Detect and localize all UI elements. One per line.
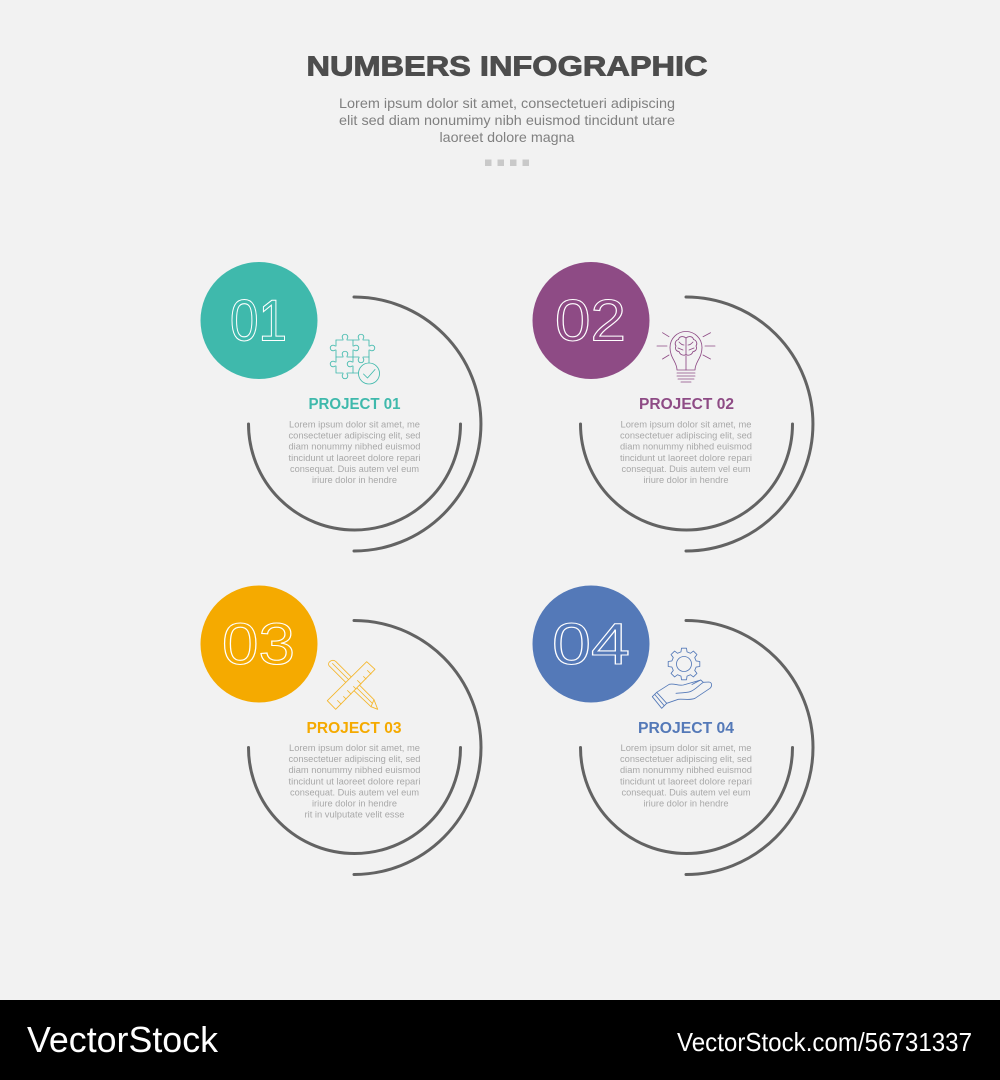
number 02: 02 xyxy=(555,288,626,354)
body text: iriure dolor in hendre xyxy=(312,798,397,810)
body text: rit in vulputate velit esse xyxy=(304,810,404,821)
inner arc xyxy=(248,748,460,854)
body text: consequat. Duis autem vel eum xyxy=(290,464,419,475)
icon: hand holding gear xyxy=(652,648,712,708)
body text xyxy=(620,743,752,810)
outer arc xyxy=(354,620,481,874)
body text: tincidunt ut laoreet dolore repari xyxy=(620,776,752,787)
icon: light bulb with brain xyxy=(657,332,715,382)
outer arc xyxy=(686,297,813,551)
body text: Lorem ipsum dolor sit amet, me xyxy=(620,420,752,430)
watermark footer xyxy=(0,1000,1000,1080)
body text: diam nonummy nibhed euismod xyxy=(288,765,420,776)
outer arc xyxy=(686,620,813,874)
body text: consequat. Duis autem vel eum xyxy=(290,788,419,798)
body text: Lorem ipsum dolor sit amet, me xyxy=(289,743,420,754)
body text: diam nonummy nibhed euismod xyxy=(288,442,420,453)
title: NUMBERS INFOGRAPHIC xyxy=(306,50,708,82)
subtitle: Lorem ipsum dolor sit amet, consectetueri adipiscing xyxy=(339,95,675,111)
body text: consectetuer adipiscing elit, sed xyxy=(288,431,420,442)
subtitle xyxy=(339,95,675,145)
label: PROJECT 01 xyxy=(308,396,401,413)
body text: iriure dolor in hendre xyxy=(644,475,728,486)
body text: consequat. Duis autem vel eum xyxy=(622,464,751,475)
icon: ruler and pencil xyxy=(327,660,378,709)
body text: tincidunt ut laoreet dolore repari xyxy=(288,453,420,464)
body text xyxy=(620,420,752,486)
body text: Lorem ipsum dolor sit amet, me xyxy=(289,420,420,430)
body text: consectetuer adipiscing elit, sed xyxy=(620,754,752,765)
panel: project 01 xyxy=(200,262,481,551)
body text: consectetuer adipiscing elit, sed xyxy=(620,431,752,442)
watermark footer: VectorStock xyxy=(27,1019,219,1060)
panel: project 03 xyxy=(200,586,481,874)
panel: project 02 xyxy=(532,262,813,551)
inner arc xyxy=(248,424,460,530)
number badge 01 xyxy=(200,262,318,379)
label: PROJECT 02 xyxy=(639,396,734,413)
divider dots xyxy=(485,160,529,166)
body text: diam nonummy nibhed euismod xyxy=(620,442,752,453)
body text: consequat. Duis autem vel eum xyxy=(622,788,751,798)
number 01: 01 xyxy=(230,288,287,354)
body text: tincidunt ut laoreet dolore repari xyxy=(288,776,420,787)
body text: iriure dolor in hendre xyxy=(312,475,397,486)
body text: diam nonummy nibhed euismod xyxy=(620,765,752,776)
subtitle: laoreet dolore magna xyxy=(440,129,575,145)
body text xyxy=(288,420,420,486)
inner arc xyxy=(580,748,792,854)
panel: project 04 xyxy=(532,586,813,874)
number badge 02 xyxy=(532,262,650,379)
number badge 03 xyxy=(200,586,318,702)
icon: puzzle with check xyxy=(330,334,380,384)
body text: iriure dolor in hendre xyxy=(644,798,728,810)
subtitle: elit sed diam nonumimy nibh euismod tincidunt utare xyxy=(339,112,675,128)
number 04: 04 xyxy=(552,612,630,677)
body text xyxy=(288,743,420,821)
body text: Lorem ipsum dolor sit amet, me xyxy=(620,743,752,754)
body text: tincidunt ut laoreet dolore repari xyxy=(620,453,752,464)
label: PROJECT 04 xyxy=(638,720,734,737)
number 03: 03 xyxy=(222,612,295,677)
outer arc xyxy=(354,297,481,551)
number badge 04 xyxy=(532,586,650,702)
inner arc xyxy=(580,424,792,530)
body text: consectetuer adipiscing elit, sed xyxy=(288,754,420,765)
label: PROJECT 03 xyxy=(306,720,402,737)
watermark footer: VectorStock.com/56731337 xyxy=(677,1027,972,1057)
